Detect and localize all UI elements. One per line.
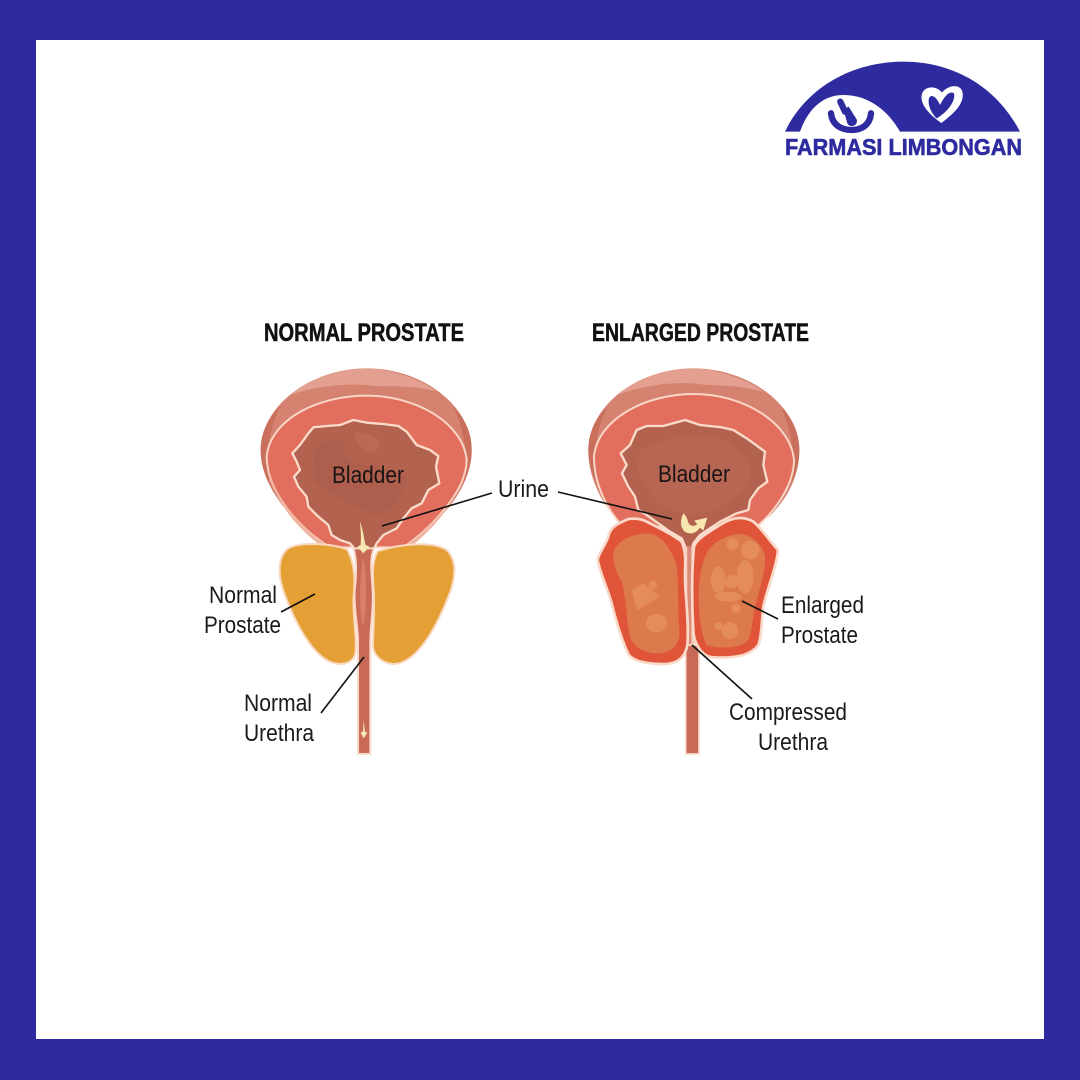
prostate nodules xyxy=(632,538,759,639)
bladder wall xyxy=(588,368,799,527)
anatomy diagram: normal xyxy=(261,368,472,754)
panel: enlarged prostate xyxy=(588,319,864,756)
label: enlarged prostate: Enlarged xyxy=(781,592,864,619)
label: normal urethra: Normal xyxy=(244,690,312,717)
label: normal prostate: Normal xyxy=(209,582,277,609)
label: normal prostate: Prostate xyxy=(204,612,281,639)
anatomy diagram: enlarged xyxy=(588,368,799,754)
urethra xyxy=(353,548,374,754)
urethra xyxy=(685,547,694,647)
label: enlarged prostate xyxy=(781,592,864,649)
enlarged prostate lobes xyxy=(598,519,688,664)
label: compressed urethra: Compressed xyxy=(729,699,847,726)
label: enlarged prostate: Prostate xyxy=(781,622,858,649)
panel: normal prostate xyxy=(204,319,472,754)
label: normal prostate xyxy=(204,582,281,639)
label: bladder: Bladder xyxy=(658,461,730,488)
leader line: compressed urethra xyxy=(692,645,752,699)
bladder lumen xyxy=(292,420,439,550)
leader line: normal prostate xyxy=(281,594,315,612)
bladder lumen xyxy=(621,420,767,550)
label: urine with leader lines: Urine xyxy=(498,476,549,503)
label: compressed urethra: Urethra xyxy=(758,729,829,756)
logo dome with mortar and heart xyxy=(785,62,1020,132)
label: compressed urethra xyxy=(729,699,847,756)
leader line: normal urethra xyxy=(321,657,364,713)
heading: enlarged prostate: ENLARGED PROSTATE xyxy=(592,319,809,347)
leader line: enlarged prostate xyxy=(742,601,778,619)
urine flow arrow xyxy=(681,513,707,533)
heading: normal prostate: NORMAL PROSTATE xyxy=(264,319,464,347)
bladder wall xyxy=(261,368,472,547)
label: bladder: Bladder xyxy=(332,462,404,489)
label: urine with leader lines xyxy=(382,476,672,526)
label: normal urethra: Urethra xyxy=(244,720,315,747)
label: normal urethra xyxy=(244,690,315,747)
logo: Farmasi Limbongan xyxy=(785,62,1022,160)
urine flow arrows xyxy=(357,522,369,553)
logo wordmark: FARMASI LIMBONGAN xyxy=(785,134,1022,160)
prostate lobes xyxy=(280,544,356,664)
